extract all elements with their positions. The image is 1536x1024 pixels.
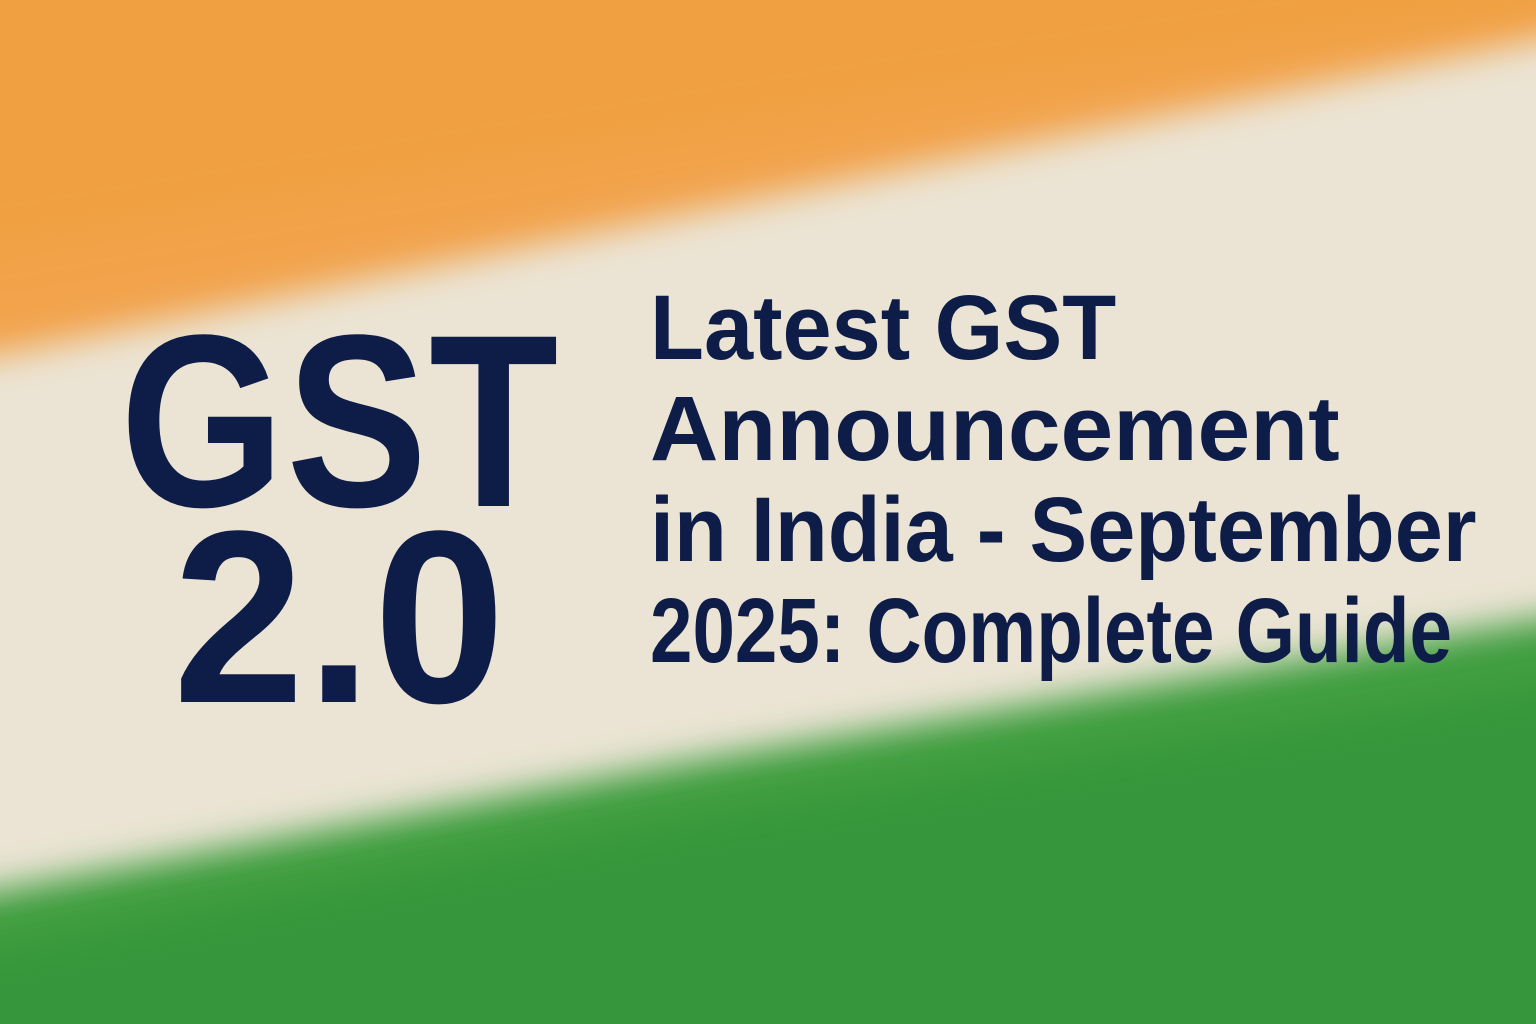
heading: GST 2.0: GST (120, 284, 560, 559)
heading: GST 2.0 (120, 284, 560, 755)
title text block (650, 278, 1477, 682)
heading: GST 2.0: 2.0 (173, 480, 507, 755)
title text block: in India - September (650, 479, 1477, 581)
title text block: Latest GST (650, 278, 1116, 379)
title text block: 2025: Complete Guide (650, 580, 1452, 682)
title text block: Announcement (650, 378, 1340, 480)
